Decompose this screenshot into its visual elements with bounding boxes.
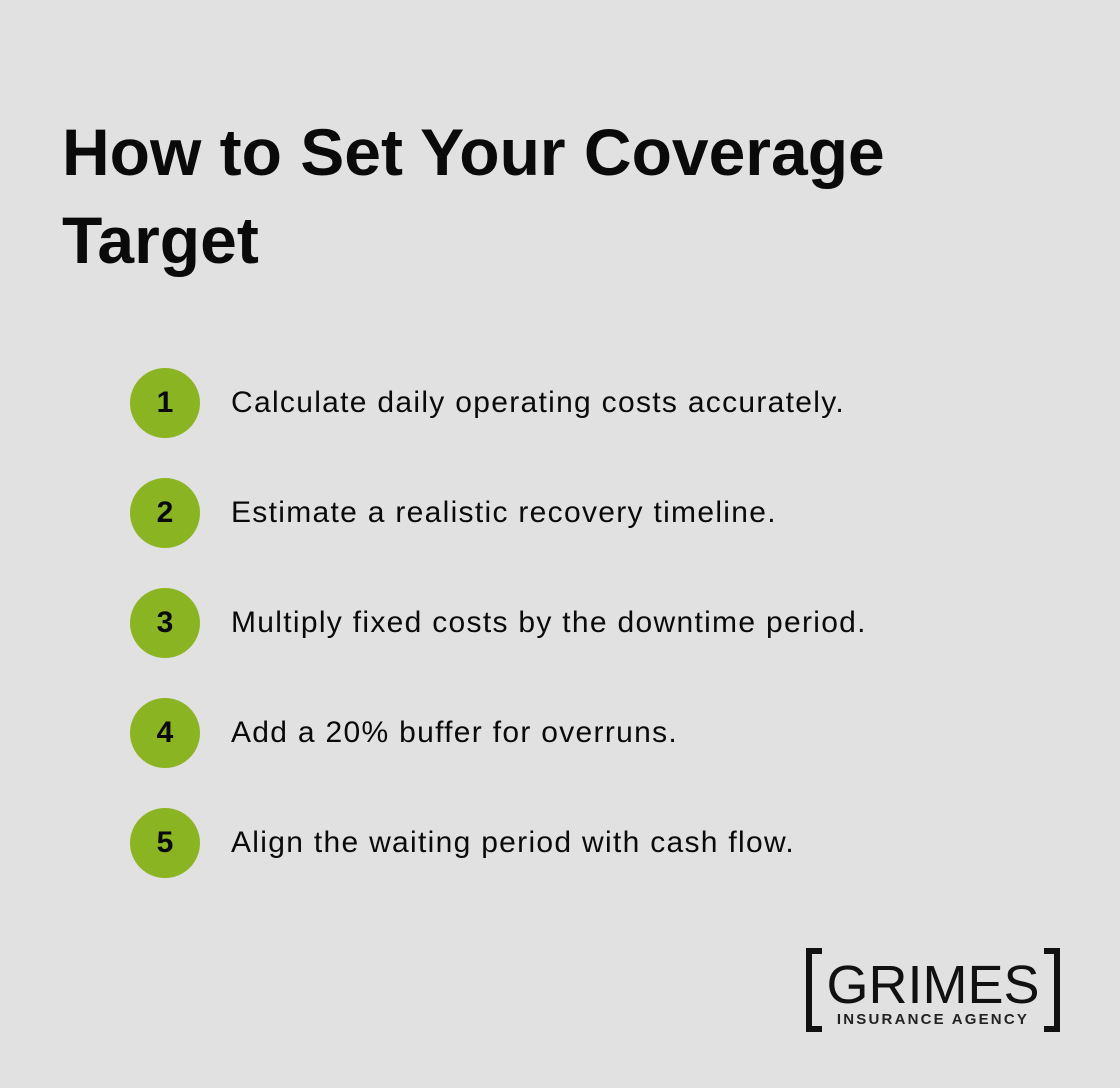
step 1: Calculate daily operating costs accurately. bbox=[231, 386, 845, 419]
step 4 bbox=[130, 698, 678, 768]
title: Target bbox=[62, 203, 259, 277]
step 4: 4 bbox=[157, 716, 173, 749]
step 3: Multiply fixed costs by the downtime period. bbox=[231, 606, 867, 639]
logo: GRIMES bbox=[826, 955, 1040, 1015]
step 5: Align the waiting period with cash flow. bbox=[231, 826, 795, 859]
logo: INSURANCE AGENCY bbox=[837, 1011, 1029, 1028]
step 3: 3 bbox=[157, 606, 173, 639]
step 4: Add a 20% buffer for overruns. bbox=[231, 716, 678, 749]
logo bbox=[806, 948, 1060, 1032]
step 1 bbox=[130, 368, 845, 438]
title bbox=[62, 115, 885, 277]
step 1: 1 bbox=[157, 386, 173, 419]
title: How to Set Your Coverage bbox=[62, 115, 885, 189]
step 2: 2 bbox=[157, 496, 173, 529]
step 2 bbox=[130, 478, 777, 548]
step 3 bbox=[130, 588, 867, 658]
step 5 bbox=[130, 808, 795, 878]
step 2: Estimate a realistic recovery timeline. bbox=[231, 496, 777, 529]
step 5: 5 bbox=[157, 826, 173, 859]
